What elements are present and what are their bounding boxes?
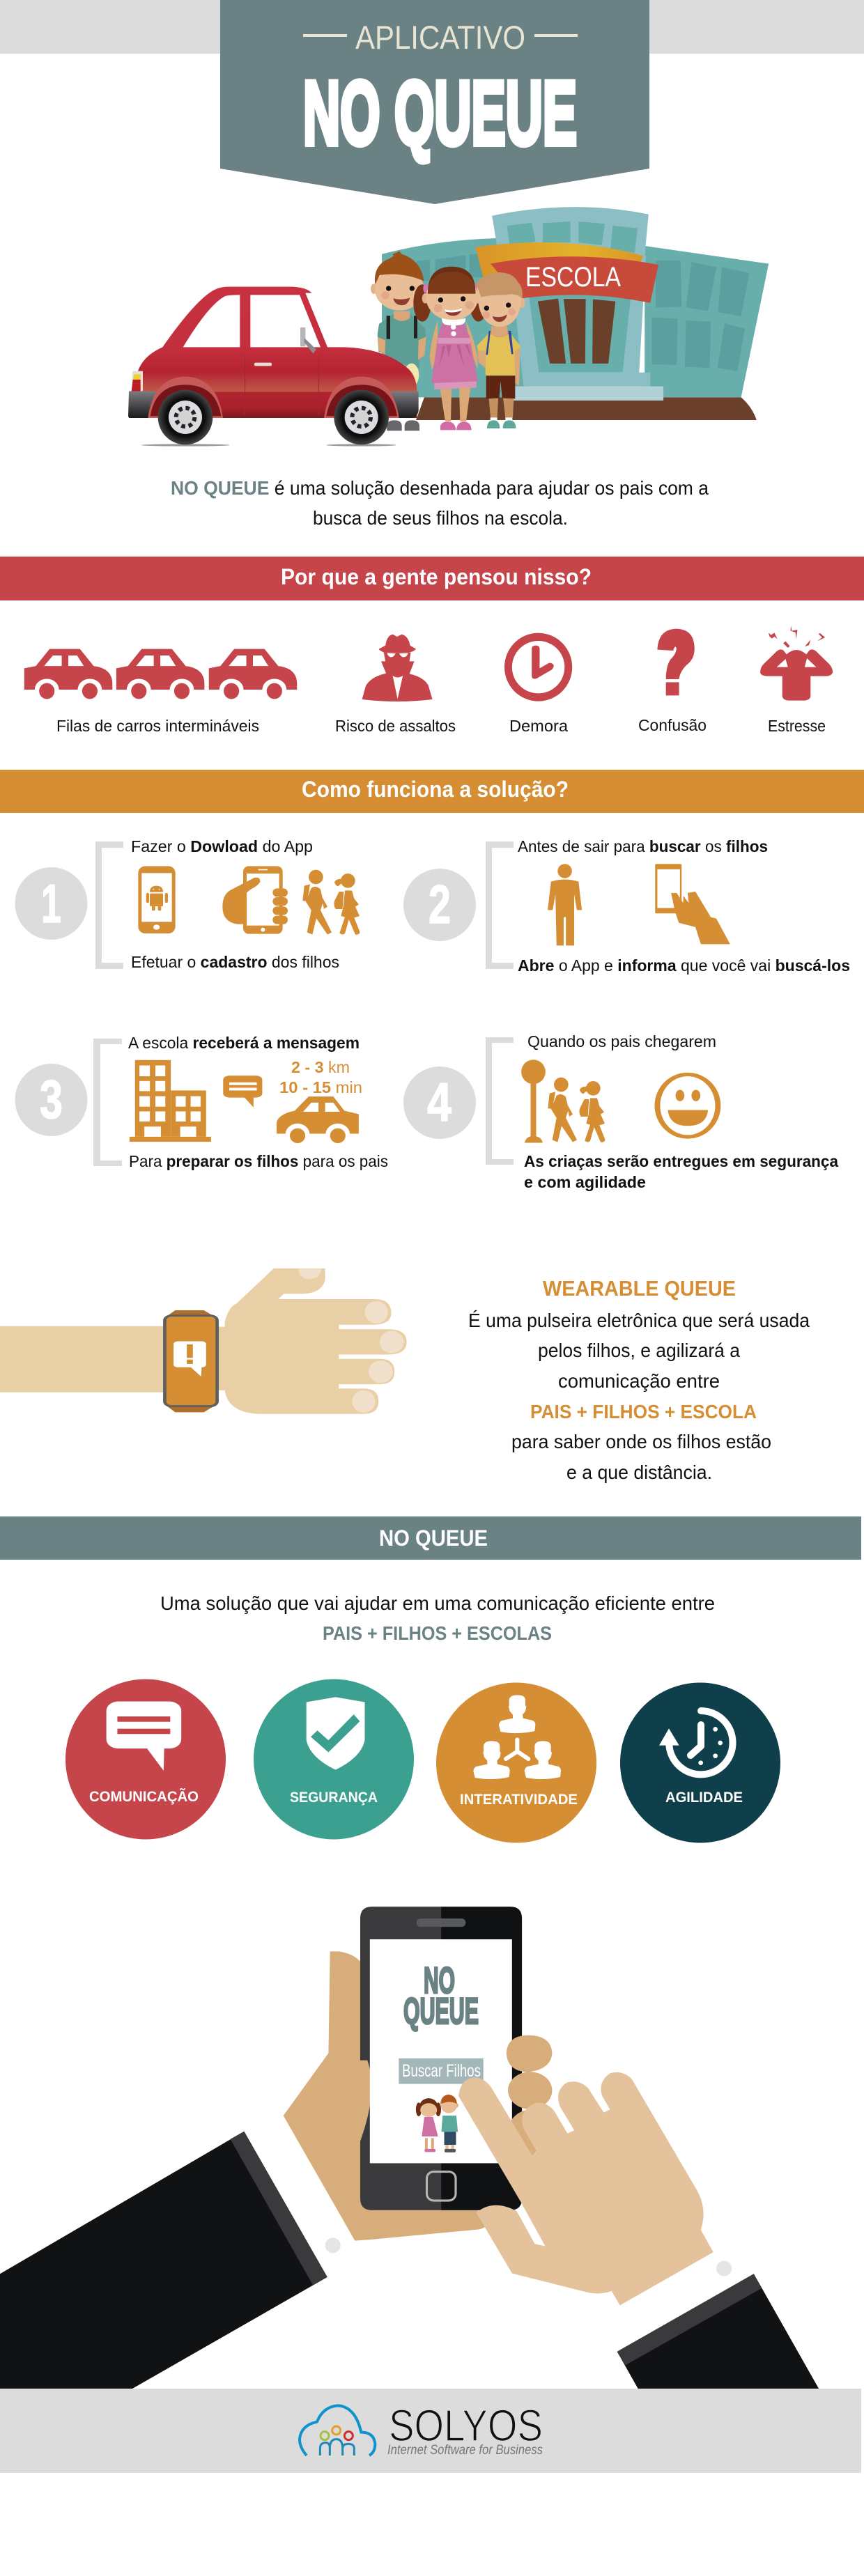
benefits intro text: Uma solução que vai ajudar em uma comunicação eficiente entre [160,1592,715,1614]
panel: problem icons [24,626,833,735]
step 1 text [131,837,339,971]
icon: row of three cars [24,649,297,701]
number badge 3 [15,1064,88,1136]
heading: WEARABLE QUEUE [543,1276,736,1301]
icon: speech bubble [223,1076,262,1108]
badge: segurança: SEGURANÇA [290,1790,378,1806]
logo tagline: Internet Software for Business [387,2443,543,2458]
boy in yellow shirt [476,272,525,428]
icon labels: Filas de carros intermináveis [56,717,259,735]
badge: agilidade [620,1683,780,1843]
wearable text: É uma pulseira eletrônica que será usada [468,1310,810,1331]
icon: car [277,1096,359,1145]
wearable text: comunicação entre [558,1370,720,1392]
icon: hand holding phone [222,866,288,934]
logo: solyos [300,2400,543,2458]
distance and time: 10 - 15 min [279,1078,362,1096]
icon: school building [130,1060,211,1142]
icon: speech bubble [107,1702,181,1771]
panel: no queue section header [0,1516,861,1560]
title line: aplicativo [303,19,578,56]
panel: step 2 [403,837,850,975]
panel: how it works section header: Como funciona a solução? [302,777,569,802]
right hand [458,2072,713,2305]
benefits intro text: PAIS + FILHOS + ESCOLAS [323,1622,552,1644]
badge: interatividade [436,1683,596,1843]
logo wordmark: SOLYOS [389,2400,543,2451]
step 1 text: Fazer o Dowload do App [131,837,313,855]
icon: stressed person [760,626,833,701]
icon: question mark [657,629,695,695]
badge: interatividade: INTERATIVIDADE [460,1792,578,1808]
step 3 text: Para preparar os filhos para os pais [129,1152,388,1170]
step 3 text [128,1034,388,1170]
small children on screen [416,2095,458,2152]
step 2 text [518,837,850,975]
icon labels: Demora [509,717,569,735]
title: no queue: NO QUEUE [303,62,577,164]
step 4 text: Quando os pais chegarem [527,1032,716,1050]
bracket [486,841,514,969]
step 2 icons [548,864,730,945]
footer band [0,2389,861,2473]
boy in green [371,251,426,430]
panel: why section header: Por que a gente pensou nisso? [281,564,592,589]
icon: standing person [548,864,582,945]
icon: hand tapping phone [655,864,730,944]
step 4 text: e com agilidade [524,1173,646,1191]
number badge 2: 2 [429,874,451,935]
panel: how it works section header [0,770,864,813]
number badge 1: 1 [41,873,61,934]
icon: walking children [548,1078,605,1142]
step 4 text [524,1032,839,1191]
right sleeve [617,2260,819,2389]
wearable text [468,1276,810,1483]
step 3 icons [130,1060,359,1145]
badge: segurança [254,1679,414,1839]
top grey band [0,0,864,54]
school sign text: ESCOLA [525,262,621,293]
badge: comunicação: COMUNICAÇÃO [89,1789,199,1805]
icon labels: Estresse [768,717,826,735]
wearable text: e a que distância. [566,1461,712,1483]
step 4 text: As criaças serão entregues em segurança [524,1152,839,1170]
phone screen logo [403,1960,479,2032]
bracket [486,1037,514,1165]
left hand [284,1951,486,2241]
wearable text: PAIS + FILHOS + ESCOLA [530,1401,757,1422]
logo cloud [300,2405,375,2455]
icon: smiley [654,1073,720,1139]
icons: thief, clock, question mark, stress [362,626,833,701]
icon labels: Risco de assaltos [335,717,456,735]
panel: wearable [0,1268,810,1483]
number badge 3: 3 [40,1069,63,1130]
icon: android phone [138,866,176,933]
number badge 4 [403,1066,476,1139]
icon labels [56,716,826,735]
badge: agilidade: AGILIDADE [665,1790,743,1806]
left sleeve [0,2132,341,2389]
panel: step 1 [15,837,360,971]
illustration: hand with wristband [0,1268,407,1414]
bracket [95,841,123,969]
icon: thief [362,635,433,701]
icon: clock [504,633,572,701]
phone screen logo: QUEUE [403,1991,479,2032]
panel: step 3 [15,1034,388,1170]
red car [128,287,419,447]
wearable text: pelos filhos, e agilizará a [538,1340,740,1361]
icon: shield with check [307,1697,365,1770]
number badge 4: 4 [427,1071,452,1133]
girl in pink dress [413,267,487,430]
step 2 text: Abre o App e informa que você vai buscá-los [518,956,850,975]
step 1 icons [138,866,360,935]
icon: three connected people [473,1695,561,1779]
wearable text: para saber onde os filhos estão [511,1431,771,1452]
children [371,251,525,430]
step 2 text: Antes de sair para buscar os filhos [518,837,768,855]
panel: no queue section header: NO QUEUE [379,1526,488,1551]
hero illustration: school, children and car [128,207,769,447]
distance and time [279,1058,362,1096]
icon labels: Confusão [638,716,707,734]
step 3 text: A escola receberá a mensagem [128,1034,360,1052]
phone [360,1907,522,2210]
badge: comunicação [65,1679,226,1839]
panel: step 4 [403,1032,839,1191]
intro text: busca de seus filhos na escola. [313,507,568,529]
benefits intro text [160,1592,715,1644]
panel: why section header [0,557,864,600]
left hand fingers [507,2035,552,2156]
icon: clock with arrow [659,1707,733,1774]
school building [382,207,769,420]
phone screen logo: NO [424,1960,455,2001]
icon: bus stop sign [521,1060,546,1143]
icon: walking children [302,870,360,935]
bracket [93,1039,122,1166]
title line: aplicativo: APLICATIVO [355,19,525,56]
number badge 1 [15,867,88,940]
phone button label: Buscar Filhos [402,2061,481,2081]
intro text: NO QUEUE é uma solução desenhada para ajudar os pais com a [171,477,709,499]
title banner [220,0,649,204]
distance and time: 2 - 3 km [291,1058,350,1076]
illustration: hands holding phone [0,1907,819,2389]
intro text [171,477,709,529]
step 1 text: Efetuar o cadastro dos filhos [131,953,339,971]
number badge 2 [403,869,476,941]
